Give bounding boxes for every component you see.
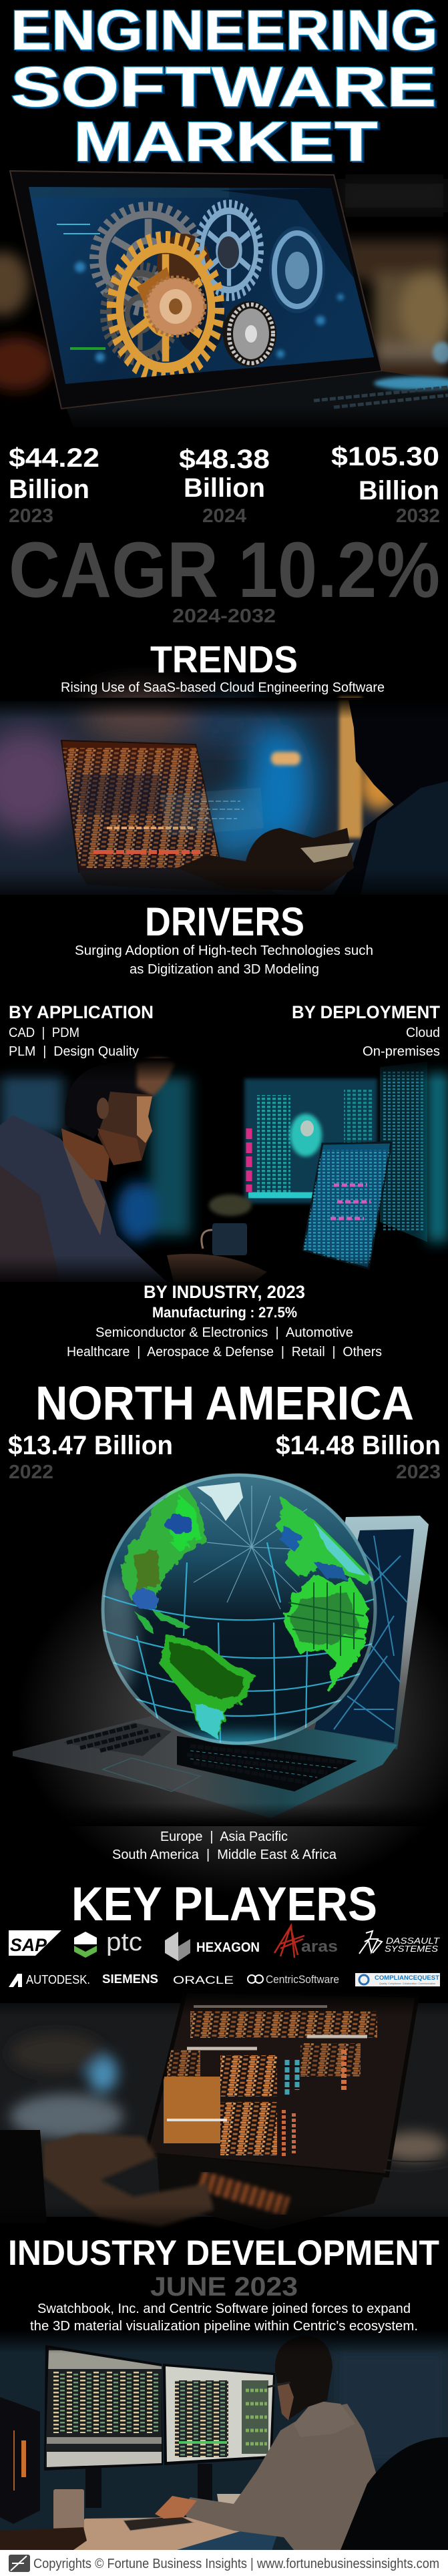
globe on laptop illustration xyxy=(0,1474,448,1896)
market size stat: 2032: $105.30 xyxy=(331,442,439,471)
continent: europe and asia xyxy=(274,1496,375,1584)
office chair xyxy=(341,2437,448,2550)
drivers heading: Surging Adoption of High-tech Technologies such xyxy=(75,943,373,958)
market size stat: 2023: 2023 xyxy=(9,505,53,527)
industry development heading: the 3D material visualization pipeline within Centric's ecosystem. xyxy=(30,2319,418,2334)
market size stat: 2032 xyxy=(331,442,440,527)
translucent left side xyxy=(97,1576,137,1696)
industry development heading xyxy=(8,2233,439,2334)
logo: Dassault Systemes: DASSAULT xyxy=(386,1936,440,1946)
plant and mug xyxy=(209,1195,252,1216)
market size stat: 2024 xyxy=(179,445,270,527)
man in hoodie xyxy=(0,1115,167,1282)
market size stat: 2023: $44.22 xyxy=(9,443,99,473)
trends heading: Rising Use of SaaS-based Cloud Engineering Software xyxy=(61,680,385,695)
desk equipment xyxy=(0,2527,87,2550)
market size stat: 2024: 2024 xyxy=(202,505,246,527)
logo: ComplianceQuest: COMPLIANCEQUEST xyxy=(375,1974,440,1981)
keyboard xyxy=(124,2516,194,2531)
continent: south america xyxy=(160,1635,254,1738)
desktop tower xyxy=(0,2397,40,2524)
right monitor xyxy=(163,2364,275,2465)
laptop lid behind globe xyxy=(314,1516,429,1749)
logo: PTC: ptc xyxy=(106,1928,142,1956)
laptop with code xyxy=(61,740,222,872)
person silhouette xyxy=(334,700,448,895)
logo: SAP: SAP xyxy=(10,1935,47,1955)
by industry segment: Manufacturing : 27.5% xyxy=(152,1304,297,1321)
logo: Oracle: ORACLE xyxy=(173,1974,234,1986)
grid lines xyxy=(100,1542,377,1743)
globe sphere xyxy=(101,1474,377,1745)
logo: Siemens: SIEMENS xyxy=(102,1972,158,1986)
workstation scene illustration xyxy=(0,2330,448,2550)
market size stat: 2024: Billion xyxy=(184,473,265,503)
lamp glow xyxy=(271,752,300,765)
man's neck xyxy=(61,1128,110,1182)
keyboard keys xyxy=(63,1723,357,1791)
logo: Hexagon: HEXAGON xyxy=(196,1940,260,1955)
north america heading and stats xyxy=(8,1377,441,1483)
title: SOFTWARE xyxy=(11,55,437,118)
drivers heading: DRIVERS xyxy=(145,899,304,944)
logo: Centric Software: CentricSoftware xyxy=(266,1973,339,1986)
market size stat: 2023 xyxy=(9,443,99,527)
by industry segment: Semiconductor & Electronics | Automotive xyxy=(95,1325,353,1340)
man in hoodie xyxy=(182,2404,377,2550)
logo: Aras: aras xyxy=(301,1938,338,1956)
typing hands xyxy=(177,828,354,891)
title: ENGINEERING xyxy=(11,0,438,61)
by application segment: BY APPLICATION xyxy=(9,1002,154,1022)
by deployment segment: BY DEPLOYMENT xyxy=(292,1002,440,1022)
laptop screen xyxy=(29,187,374,384)
continent: north america xyxy=(120,1482,206,1607)
hero illustration: laptop with gears xyxy=(0,171,448,434)
market size stat: 2023: Billion xyxy=(9,475,89,504)
laptop base xyxy=(79,868,280,895)
holographic panel xyxy=(160,788,264,836)
logo: Autodesk: AUTODESK. xyxy=(26,1973,90,1986)
other regions list: Europe | Asia Pacific xyxy=(160,1830,288,1844)
CAGR figure: 2024-2032 xyxy=(172,606,276,627)
industry development heading: Swatchbook, Inc. and Centric Software joined forces to expand xyxy=(37,2302,411,2316)
man's face xyxy=(97,1092,152,1165)
logo: Hexagon xyxy=(165,1932,260,1961)
logo: ComplianceQuest: Quality. Compliance. Collaboration. Communication xyxy=(379,1982,435,1985)
foreground laptop xyxy=(303,1142,391,1269)
logo: PTC xyxy=(74,1928,142,1958)
other regions list: South America | Middle East & Africa xyxy=(112,1848,337,1862)
north america heading and stats: $14.48 Billion xyxy=(276,1431,441,1460)
coding laptop scene illustration xyxy=(0,1990,448,2243)
by application segment: CAD | PDM xyxy=(9,1026,79,1040)
drivers heading xyxy=(75,899,373,977)
by application segment xyxy=(9,1002,154,1059)
logo: Dassault Systemes xyxy=(359,1931,440,1954)
hands on keyboard xyxy=(157,2153,384,2230)
man's head xyxy=(275,2336,332,2420)
laptop screen with code xyxy=(146,1991,417,2175)
footer bar xyxy=(0,2550,448,2576)
continent: greenland xyxy=(197,1482,243,1521)
laptop keyboard xyxy=(67,371,448,427)
logo: ComplianceQuest xyxy=(355,1973,440,1986)
market size stat: 2032: Billion xyxy=(359,476,439,505)
left monitor xyxy=(44,2345,163,2471)
by industry segment xyxy=(67,1282,382,1359)
north america heading and stats: $13.47 Billion xyxy=(8,1431,173,1460)
logo: SAP xyxy=(9,1930,61,1956)
developer scene illustration xyxy=(0,1058,448,1287)
trends heading: TRENDS xyxy=(150,638,298,681)
logo: Aras xyxy=(274,1926,338,1958)
footer logo xyxy=(9,2555,30,2572)
logo: Dassault Systemes: SYSTEMES xyxy=(385,1944,438,1954)
screen gears xyxy=(29,187,361,379)
desk xyxy=(27,2516,283,2550)
man's hair xyxy=(65,1062,155,1138)
by industry segment: Healthcare | Aerospace & Defense | Retail | Others xyxy=(67,1345,382,1359)
drivers heading: as Digitization and 3D Modeling xyxy=(130,962,319,977)
continent: africa xyxy=(283,1574,369,1691)
north america heading and stats: 2022 xyxy=(9,1462,53,1483)
by industry segment: BY INDUSTRY, 2023 xyxy=(144,1282,305,1302)
trends heading xyxy=(61,638,385,695)
other regions list xyxy=(112,1830,337,1862)
north america heading and stats: 2023 xyxy=(396,1462,441,1483)
market size stat: 2032: 2032 xyxy=(396,505,440,527)
trends scene illustration xyxy=(0,691,448,905)
title xyxy=(11,0,438,173)
by application segment: PLM | Design Quality xyxy=(9,1044,139,1059)
back monitor xyxy=(244,1078,377,1203)
monitor stands xyxy=(85,2468,101,2508)
industry development heading: JUNE 2023 xyxy=(150,2272,298,2302)
market size stat: 2024: $48.38 xyxy=(179,445,270,474)
right monitor xyxy=(380,1062,427,1242)
by deployment segment: On-premises xyxy=(363,1044,440,1059)
by deployment segment xyxy=(292,1002,440,1059)
cups xyxy=(53,2489,84,2531)
by deployment segment: Cloud xyxy=(406,1026,440,1040)
key players heading: KEY PLAYERS xyxy=(71,1878,377,1931)
laptop base and keyboard xyxy=(13,1716,397,1818)
title: MARKET xyxy=(73,110,378,173)
laptop lid xyxy=(10,171,382,409)
north america heading and stats: NORTH AMERICA xyxy=(35,1377,414,1430)
radial burst xyxy=(194,1486,307,1609)
